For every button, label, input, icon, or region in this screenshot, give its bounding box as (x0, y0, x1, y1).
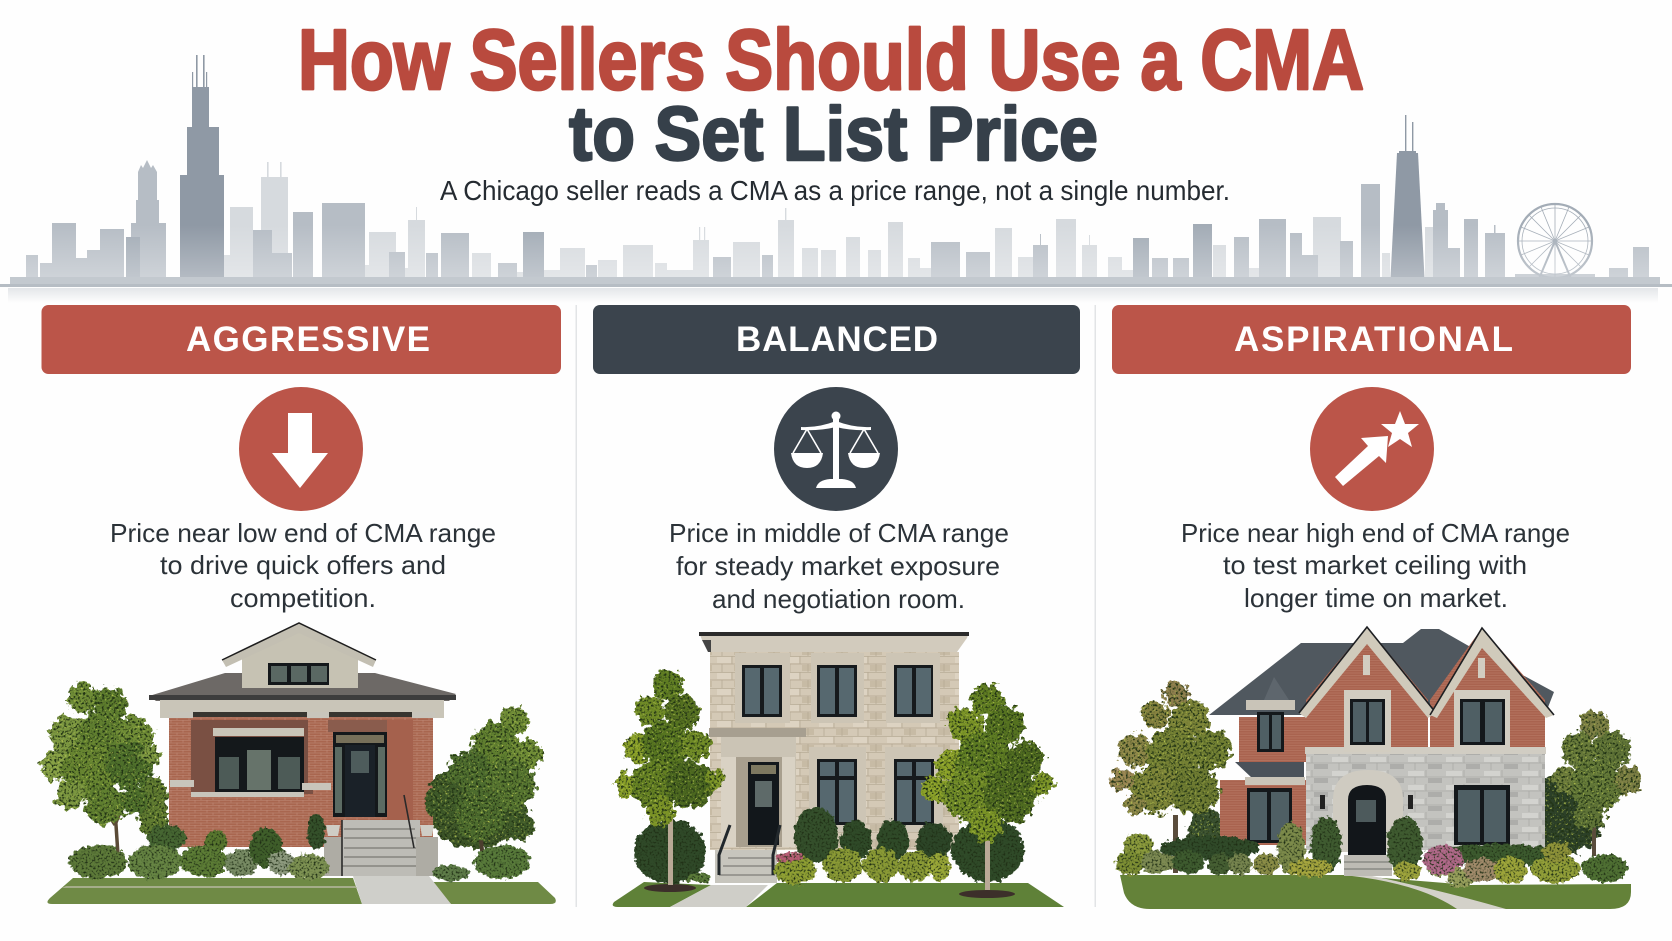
description: balanced: and negotiation room. (712, 584, 965, 614)
illustration: brick bungalow (41, 623, 556, 904)
skyline reflection (8, 288, 1658, 303)
tree: left (41, 683, 160, 855)
tree: right (922, 684, 1054, 890)
title line 1: How Sellers Should Use a CMA (298, 13, 1364, 108)
shrubs (69, 814, 530, 881)
tree: right (425, 706, 541, 860)
back trees (1188, 775, 1605, 855)
description: aspirational: longer time on market. (1244, 583, 1508, 613)
subtitle: A Chicago seller reads a CMA as a price range, not a single number. (440, 175, 1230, 206)
house body (149, 623, 456, 847)
icon: down arrow (239, 387, 363, 511)
description: aggressive: Price near low end of CMA range (110, 518, 496, 548)
house body (699, 632, 969, 850)
shrubs (634, 807, 1024, 885)
skyline ground (0, 284, 1672, 287)
title (298, 13, 1364, 177)
header bar: aggressive (42, 305, 561, 374)
front steps (715, 825, 780, 883)
description: aggressive (110, 518, 496, 613)
header bar: balanced (593, 305, 1080, 374)
skyline low-rise band (10, 277, 1660, 284)
description: balanced (669, 518, 1009, 614)
skyscraper: John Hancock Center (1390, 115, 1425, 287)
description: aspirational (1181, 518, 1570, 613)
skyscraper: Willis Tower (180, 55, 224, 287)
icon: arrow and star (1310, 387, 1434, 511)
front steps (324, 795, 438, 876)
front steps (1344, 855, 1392, 876)
column divider right (1094, 305, 1096, 907)
tree: right (1552, 710, 1642, 856)
back trees (138, 761, 526, 849)
panel: aspirational (1110, 305, 1642, 909)
lawn (47, 876, 556, 904)
icon: balance scale (774, 387, 898, 511)
header bar: aggressive: AGGRESSIVE (186, 320, 430, 359)
description: balanced: for steady market exposure (676, 551, 1000, 581)
lawn (613, 882, 1064, 907)
skyline haze (0, 225, 1672, 285)
column divider left (576, 305, 577, 907)
description: aggressive: to drive quick offers and (160, 550, 446, 580)
panel: aggressive (41, 305, 561, 904)
illustration: brick and stone manor (1110, 627, 1642, 909)
header bar: aspirational (1112, 305, 1631, 374)
description: aggressive: competition. (230, 583, 376, 613)
panel: balanced (593, 305, 1080, 907)
portico (709, 728, 806, 847)
header bar: balanced: BALANCED (736, 320, 938, 359)
Ferris wheel (1518, 204, 1592, 281)
description: aspirational: Price near high end of CMA range (1181, 518, 1570, 548)
shrubs (1115, 817, 1628, 887)
description: balanced: Price in middle of CMA range (669, 518, 1009, 548)
description: aspirational: to test market ceiling with (1223, 550, 1527, 580)
header bar: aspirational: ASPIRATIONAL (1234, 320, 1513, 359)
dormer (222, 623, 376, 688)
lawn (1120, 875, 1631, 909)
Chicago skyline (0, 55, 1672, 303)
tree: left (615, 670, 725, 885)
title line 2: to Set List Price (569, 92, 1098, 177)
house body (1209, 627, 1554, 855)
tree: left (1110, 682, 1232, 873)
illustration: limestone house (613, 632, 1064, 907)
